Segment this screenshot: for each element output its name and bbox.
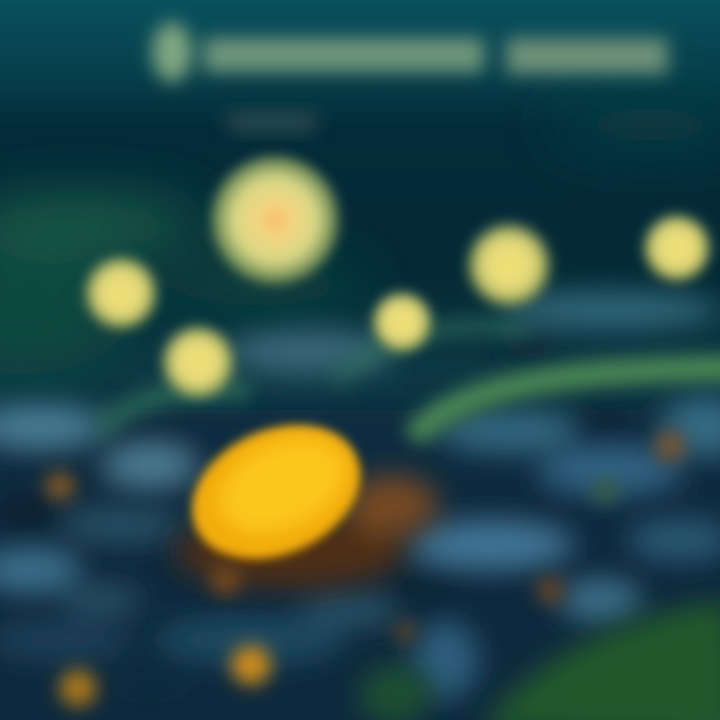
orb centre — [367, 287, 437, 357]
brown earth around coin — [175, 475, 438, 588]
subtitle — [228, 112, 316, 132]
large orb — [205, 150, 345, 290]
moss lower right — [359, 600, 720, 720]
title banner — [152, 22, 668, 82]
orb far right — [638, 209, 716, 287]
green leaf blades — [105, 326, 720, 430]
glowing orbs — [79, 150, 716, 404]
small amber lights — [45, 431, 685, 707]
orb left — [79, 251, 163, 335]
large yellow coin — [170, 400, 382, 584]
orb right — [461, 217, 557, 313]
stone field — [0, 292, 720, 720]
left green hills — [0, 103, 720, 375]
orb lower left — [156, 320, 240, 404]
